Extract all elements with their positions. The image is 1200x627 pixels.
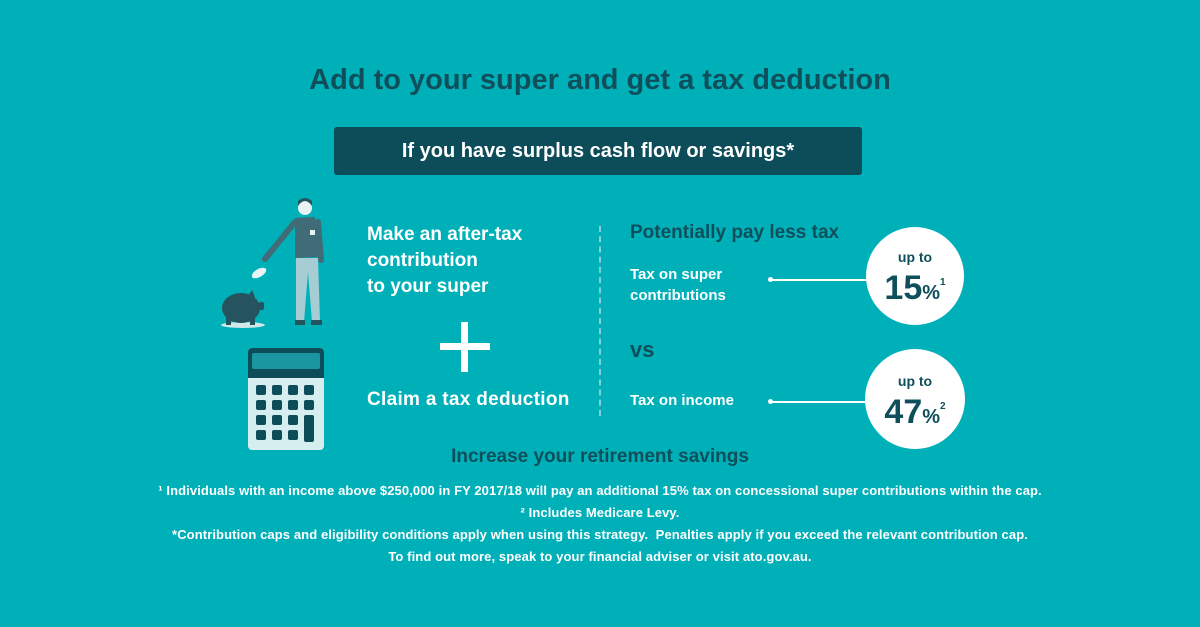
text: after-tax contribution: contribution xyxy=(367,250,478,271)
subheading: increase savings: Increase your retirement savings xyxy=(451,446,749,467)
divider xyxy=(599,226,601,416)
circle: 15%: up to xyxy=(898,249,932,265)
banner: If you have surplus cash flow or savings* xyxy=(402,140,794,162)
icon: plus xyxy=(440,322,490,372)
text: after-tax contribution: to your super xyxy=(367,276,488,297)
footnotes: ² Includes Medicare Levy. xyxy=(520,505,680,520)
title: Add to your super and get a tax deduction xyxy=(309,64,891,96)
vs: vs xyxy=(630,337,654,362)
heading: pay less tax: Potentially pay less tax xyxy=(630,222,839,243)
label: tax on super: contributions xyxy=(630,287,726,304)
footnotes: ¹ Individuals with an income above $250,000 in FY 2017/18 will pay an additional 15% tax on concessional super contributions within the cap. xyxy=(158,483,1042,498)
label: tax on income: Tax on income xyxy=(630,392,734,409)
circle: 15%: 15%1 xyxy=(884,269,946,307)
text: claim deduction: Claim a tax deduction xyxy=(367,389,570,410)
connector 2 xyxy=(768,399,866,404)
text: after-tax contribution xyxy=(367,224,522,297)
footnotes: To find out more, speak to your financial adviser or visit ato.gov.au. xyxy=(388,549,812,564)
footnotes xyxy=(158,483,1042,564)
circle: 47% xyxy=(865,349,965,449)
banner xyxy=(334,127,862,175)
illustration: man and piggy bank xyxy=(221,198,324,328)
text: after-tax contribution: Make an after-tax xyxy=(367,224,522,245)
label: tax on super xyxy=(630,266,726,304)
circle: 15% xyxy=(866,227,964,325)
circle: 47%: 47%2 xyxy=(884,393,946,431)
icon: calculator xyxy=(248,348,324,450)
circle: 47%: up to xyxy=(898,373,932,389)
label: tax on super: Tax on super xyxy=(630,266,722,283)
footnotes: *Contribution caps and eligibility conditions apply when using this strategy. Penalties apply if you exceed the relevant contribution cap. xyxy=(172,527,1028,542)
connector 1 xyxy=(768,277,866,282)
